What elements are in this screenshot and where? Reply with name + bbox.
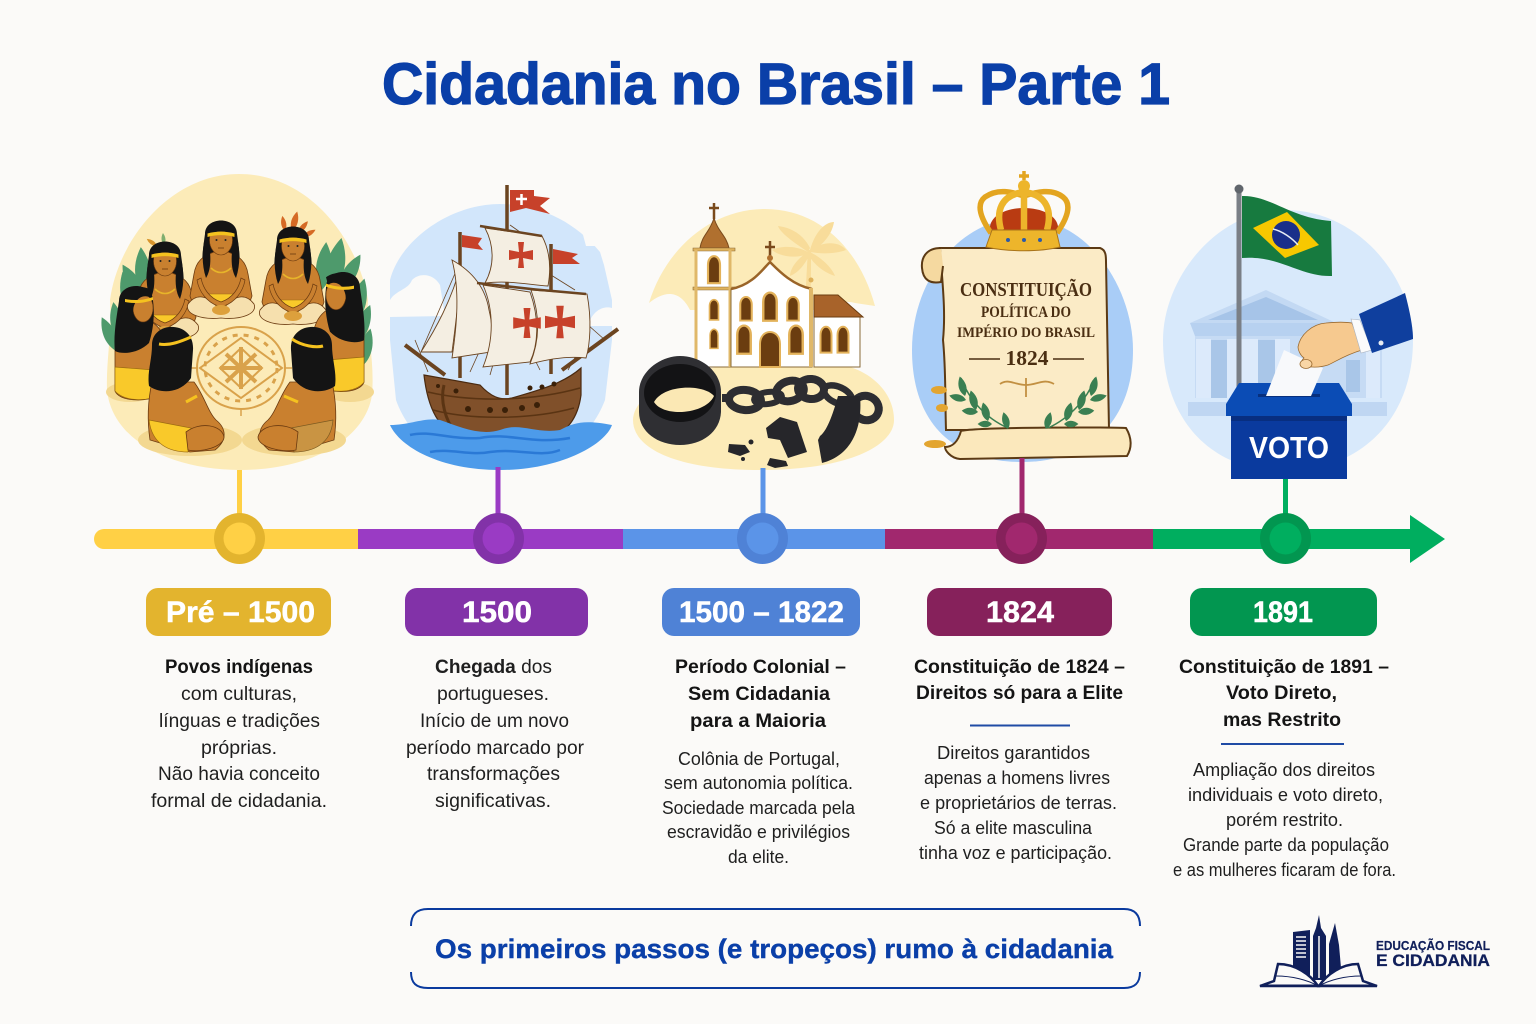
- text block: Constituição de 1891: Voto Direto,: [1226, 682, 1337, 704]
- document title: CONSTITUIÇÃO: [960, 278, 1092, 301]
- callout: tagline: [411, 909, 1140, 988]
- text block: Período Colonial: Colônia de Portugal,: [678, 749, 840, 769]
- text block: Período Colonial: Período Colonial –: [675, 656, 846, 678]
- date pill: Pré-1500: [146, 588, 331, 636]
- marker: 1824: [996, 513, 1047, 564]
- text block: Constituição de 1824: [914, 656, 1125, 863]
- blue blob: [1163, 210, 1413, 472]
- text block: Período Colonial: para a Maioria: [690, 710, 826, 732]
- text block: Chegada dos portugueses: significativas.: [435, 790, 551, 812]
- crown: [980, 171, 1068, 251]
- text block: Constituição de 1824: Só a elite masculina: [934, 818, 1093, 838]
- text block: Chegada dos portugueses: período marcado por: [406, 737, 584, 759]
- person back left: [148, 327, 224, 452]
- text block: Povos indígenas: línguas e tradições: [159, 710, 320, 732]
- government building: [1188, 290, 1387, 416]
- sea waves: [390, 419, 612, 470]
- leaves: [96, 236, 377, 370]
- red crosses: [509, 242, 533, 268]
- text block: Chegada dos portugueses: Chegada dos: [435, 656, 552, 678]
- marker: 1891: [1260, 513, 1311, 564]
- date pill: 1500-1822: [662, 588, 860, 636]
- illustration: indigenous peoples circle: [96, 174, 377, 470]
- timeline: [94, 458, 1445, 564]
- illustration: constitution scroll and crown: [912, 171, 1133, 462]
- date pill: 1500-1822: 1500 – 1822: [679, 596, 844, 629]
- segment: purple: [358, 529, 623, 549]
- text block: Povos indígenas: Povos indígenas: [165, 656, 313, 678]
- connector stems: [237, 458, 1288, 520]
- shadows: [106, 382, 374, 456]
- broken cuff: [818, 396, 860, 463]
- chain: [722, 378, 883, 425]
- sails: [421, 228, 590, 367]
- text block: Constituição de 1824: apenas a homens livres: [924, 768, 1110, 788]
- windows: [708, 256, 720, 283]
- door: [760, 332, 780, 367]
- date pill: 1891: [1190, 588, 1377, 636]
- marker: 1500: [473, 513, 524, 564]
- text block: Constituição de 1824: Direitos só para a Elite: [916, 682, 1123, 704]
- text block: Constituição de 1891: Constituição de 1891 –: [1179, 656, 1389, 678]
- segment: magenta: [885, 529, 1153, 549]
- segment: yellow: [94, 529, 358, 549]
- text block: Período Colonial: Sem Cidadania: [688, 683, 830, 705]
- text block: Constituição de 1891: [1173, 656, 1396, 880]
- bottom roll: [945, 427, 1131, 459]
- hand with sleeve: [1298, 293, 1413, 368]
- text block: Constituição de 1824: Constituição de 1824 –: [914, 656, 1125, 678]
- label: VOTO: VOTO: [1249, 430, 1329, 465]
- person right: [312, 272, 365, 392]
- ornament: [1000, 378, 1054, 397]
- text block: Constituição de 1824: tinha voz e participação.: [919, 843, 1112, 863]
- flagpole: [1236, 190, 1242, 387]
- masts and rigging: [405, 185, 618, 395]
- logo text: EDUCAÇÃO FISCAL: [1376, 938, 1490, 953]
- text block: Povos indígenas: Não havia conceito: [158, 763, 320, 785]
- logo: [1260, 915, 1490, 987]
- text block: Período Colonial: da elite.: [728, 847, 789, 867]
- clouds: [390, 205, 612, 326]
- tower: [697, 249, 731, 367]
- illustration: ballot box and flag: [1163, 184, 1413, 479]
- person back right: [258, 327, 336, 452]
- text block: Período Colonial: [662, 656, 856, 867]
- text block: Povos indígenas: formal de cidadania.: [151, 790, 327, 812]
- icon: book and city: [1260, 915, 1377, 987]
- background blob: sand: [107, 174, 373, 470]
- illustration: colonial church and broken shackles: [633, 203, 894, 470]
- person top centre: [187, 220, 255, 318]
- text block: Período Colonial: escravidão e privilégios: [667, 822, 850, 842]
- text block: Chegada dos portugueses: transformações: [427, 763, 560, 785]
- text block: Constituição de 1824: Direitos garantidos: [937, 743, 1090, 763]
- text block: Povos indígenas: próprias.: [201, 737, 277, 759]
- sky blob: [390, 204, 612, 470]
- illustration: Portuguese caravel: [390, 185, 618, 470]
- parchment: [940, 248, 1109, 430]
- text block: Período Colonial: Sociedade marcada pela: [662, 798, 856, 818]
- person left back: [131, 242, 199, 339]
- church facade: [731, 263, 812, 367]
- segment: green with arrow: [1153, 515, 1445, 563]
- hull: [424, 368, 581, 436]
- seal wax: [924, 386, 948, 448]
- text block: Constituição de 1891: individuais e voto direto,: [1188, 785, 1383, 805]
- sand mandala: [190, 327, 292, 416]
- text block: Povos indígenas: com culturas,: [181, 683, 297, 705]
- text block: Constituição de 1824: e proprietários de terras.: [920, 793, 1117, 813]
- broken fragments: [728, 417, 807, 468]
- text block: Chegada dos portugueses: [406, 656, 584, 812]
- date pill: 1500: 1500: [462, 596, 532, 629]
- text block: Constituição de 1891: e as mulheres ficaram de fora.: [1173, 860, 1396, 880]
- ballot box: [1226, 350, 1352, 479]
- Brazilian flag: [1242, 196, 1332, 276]
- text block: Constituição de 1891: Grande parte da população: [1183, 835, 1389, 855]
- person left: [114, 286, 167, 400]
- flags: [510, 190, 550, 214]
- callout: tagline: Os primeiros passos (e tropeços) rumo à cidadania: [435, 934, 1114, 964]
- title: Cidadania no Brasil – Parte 1: [382, 52, 1170, 117]
- person top right: [259, 226, 327, 324]
- document title: POLÍTICA DO: [981, 302, 1071, 321]
- date pill: 1891: 1891: [1253, 596, 1313, 629]
- marker: 1500-1822: [737, 513, 788, 564]
- text block: Constituição de 1891: Ampliação dos direitos: [1193, 760, 1375, 780]
- date pill: 1824: [927, 588, 1112, 636]
- document title: IMPÉRIO DO BRASIL: [957, 324, 1095, 341]
- marker: pre-1500: [214, 513, 265, 564]
- text block: Chegada dos portugueses: portugueses.: [437, 683, 549, 705]
- shackle ring: [639, 356, 721, 445]
- date pill: 1500: [405, 588, 588, 636]
- document title: [957, 278, 1095, 370]
- sand blobs: [649, 209, 875, 310]
- date pill: Pré-1500: Pré – 1500: [166, 596, 315, 629]
- text block: Povos indígenas: [151, 656, 327, 812]
- text block: Período Colonial: sem autonomia política.: [664, 773, 853, 793]
- text block: Constituição de 1891: porém restrito.: [1226, 810, 1343, 830]
- side wing: [814, 317, 860, 367]
- feathers: [280, 211, 317, 239]
- document title: 1824: [1006, 346, 1049, 370]
- text block: Constituição de 1891: mas Restrito: [1223, 709, 1341, 731]
- blue blob: [912, 218, 1133, 462]
- date pill: 1824: 1824: [986, 596, 1054, 629]
- text block: Chegada dos portugueses: Início de um novo: [420, 710, 569, 732]
- segment: blue: [623, 529, 885, 549]
- logo: E CIDADANIA: [1376, 951, 1490, 970]
- laurel: [948, 376, 1108, 430]
- palm: [772, 222, 846, 305]
